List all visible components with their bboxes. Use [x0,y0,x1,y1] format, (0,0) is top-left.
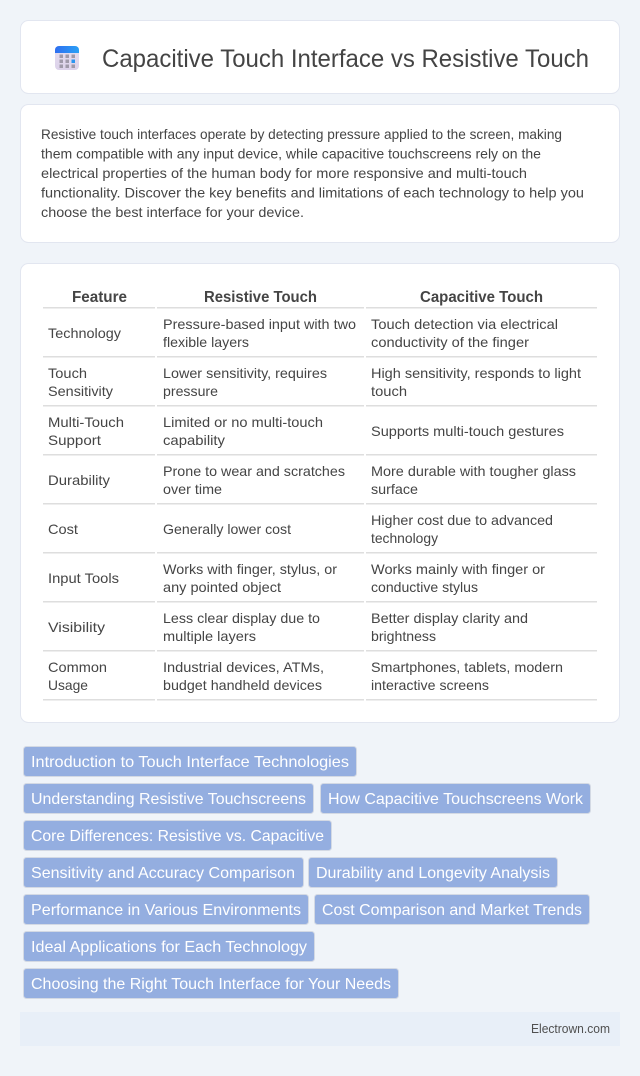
tag: durability [308,858,558,888]
table header row: Capacitive Touch [420,289,543,306]
row: Cost: Generally lower cost [163,521,291,537]
row: Multi-Touch Support: Support [48,432,101,448]
row: Durability: over time [163,481,222,497]
row: Durability: More durable with tougher glass [371,463,576,479]
row: Touch Sensitivity: Lower sensitivity, requires [163,365,327,381]
row: Common Usage: budget handheld devices [163,677,322,693]
table header row [72,289,543,306]
row: Common Usage: interactive screens [371,677,489,693]
row: Cost: Higher cost due to advanced [371,512,553,528]
row: Touch Sensitivity: Touch [48,365,87,381]
row: Touch Sensitivity: Sensitivity [48,383,113,399]
row: Technology: conductivity of the finger [371,334,529,350]
tag: choosing: Choosing the Right Touch Interface for Your Needs [31,976,391,993]
tag: resistive: Understanding Resistive Touchscreens [31,791,306,808]
row: Multi-Touch Support: capability [163,432,225,448]
row: Durability [48,463,576,497]
row: Cost [48,512,553,546]
row: Durability: surface [371,481,418,497]
row: Input Tools: conductive stylus [371,579,478,595]
topic tags [24,746,590,998]
tag: choosing [24,968,398,998]
tag: performance [24,894,308,924]
row: Multi-Touch Support [48,414,564,448]
row: Touch Sensitivity: pressure [163,383,218,399]
icon: calendar grid [55,46,79,70]
table header row: Feature [72,289,127,306]
tag: capacitive: How Capacitive Touchscreens Work [328,791,584,808]
row: Input Tools: Input Tools [48,570,119,586]
row: Technology: Pressure-based input with two [163,316,356,332]
row: Visibility [48,610,528,644]
intro paragraph: Resistive touch interfaces operate by detecting pressure applied to the screen, making [41,126,562,142]
row: Visibility: Visibility [48,619,105,635]
tag: applications [24,932,314,962]
tag: sensitivity [24,858,304,888]
row: Input Tools: any pointed object [163,579,281,595]
tag: sensitivity: Sensitivity and Accuracy Comparison [31,865,295,882]
row: Visibility: multiple layers [163,628,256,644]
tag: performance: Performance in Various Environments [31,902,301,919]
row: Touch Sensitivity: High sensitivity, responds to light [371,365,581,381]
row: Common Usage [48,659,563,693]
row: Visibility: brightness [371,628,436,644]
row: Common Usage: Common [48,659,107,675]
row: Multi-Touch Support: Limited or no multi-touch [163,414,323,430]
row: Durability: Prone to wear and scratches [163,463,345,479]
table header row: Resistive Touch [204,289,317,306]
tag: introduction [24,746,356,776]
tag: cost: Cost Comparison and Market Trends [322,902,582,919]
panel: comparison table [20,264,620,722]
intro paragraph: them compatible with any input device, while capacitive touchscreens rely on the [41,146,541,162]
panel: intro text [20,104,620,242]
tag: core differences [24,820,332,850]
row: Touch Sensitivity [48,365,581,399]
row: Input Tools: Works mainly with finger or [371,561,545,577]
tag: applications: Ideal Applications for Each Technology [31,939,307,956]
row: Input Tools [48,561,545,595]
row: Durability: Durability [48,472,110,488]
row: Multi-Touch Support: Supports multi-touch gestures [371,423,564,439]
row: Input Tools: Works with finger, stylus, or [163,561,337,577]
row: Technology: Technology [48,325,121,341]
row: Multi-Touch Support: Multi-Touch [48,414,124,430]
row: Technology: flexible layers [163,334,249,350]
tag: core differences: Core Differences: Resistive vs. Capacitive [31,828,324,845]
row: Touch Sensitivity: touch [371,383,407,399]
row: Cost: Cost [48,521,78,537]
footer: Electrown.com [531,1022,610,1036]
intro paragraph [41,126,584,220]
intro paragraph: functionality. Discover the key benefits and limitations of each technology to help you [41,184,584,200]
tag: cost [314,894,590,924]
table rules [43,307,597,700]
row: Visibility: Less clear display due to [163,610,320,626]
tag: durability: Durability and Longevity Analysis [316,865,550,882]
row: Common Usage: Usage [48,677,88,693]
tag: resistive [24,784,314,814]
row: Visibility: Better display clarity and [371,610,528,626]
intro paragraph: electrical properties of the human body for more responsive and multi-touch [41,165,527,181]
row: Cost: technology [371,530,438,546]
tag: capacitive [320,784,590,814]
tag: introduction: Introduction to Touch Interface Technologies [31,754,349,771]
title: Capacitive Touch Interface vs Resistive Touch [102,45,589,73]
footer [20,1012,620,1046]
row: Common Usage: Industrial devices, ATMs, [163,659,324,675]
panel: header [20,20,620,94]
row: Technology: Touch detection via electrical [371,316,558,332]
row: Common Usage: Smartphones, tablets, modern [371,659,563,675]
intro paragraph: choose the best interface for your device. [41,204,304,220]
row: Technology [48,316,558,350]
